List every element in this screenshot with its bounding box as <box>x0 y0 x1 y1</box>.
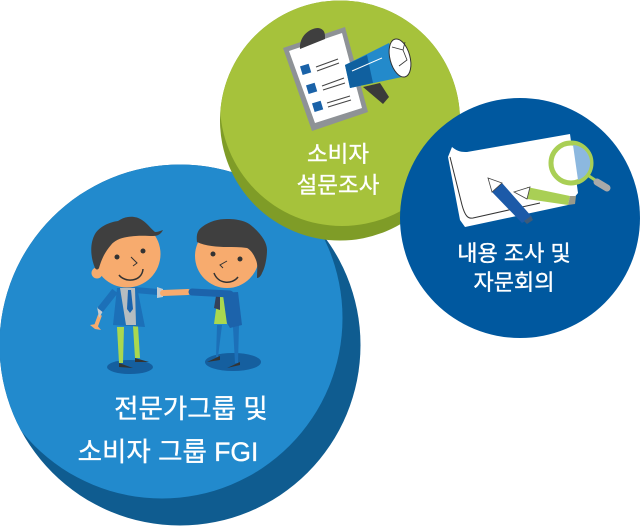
panel: expert and consumer group FGI circle <box>0 138 360 526</box>
heading: expert and consumer group FGI: 소비자 그룹 FGI <box>78 437 258 467</box>
illustration: right man <box>192 219 267 371</box>
icon: megaphone <box>345 37 415 104</box>
icon: document with pencils <box>448 134 578 227</box>
icon: magnifying glass <box>551 143 607 188</box>
panel: consumer survey circle <box>220 0 464 240</box>
icon: green pencil <box>514 187 576 205</box>
icon: blue pencil <box>488 178 533 224</box>
heading: content survey and advisory meeting: 자문회의 <box>474 270 554 295</box>
panel: content survey circle <box>400 98 640 338</box>
heading: expert and consumer group FGI: 전문가그룹 및 <box>114 394 268 424</box>
illustration: left man <box>90 217 188 374</box>
heading: content survey and advisory meeting: 내용 조사 및 <box>457 241 571 266</box>
icon: clipboard with checklist <box>283 27 368 131</box>
heading: consumer survey: 설문조사 <box>297 173 380 198</box>
heading: consumer survey: 소비자 <box>307 142 369 167</box>
